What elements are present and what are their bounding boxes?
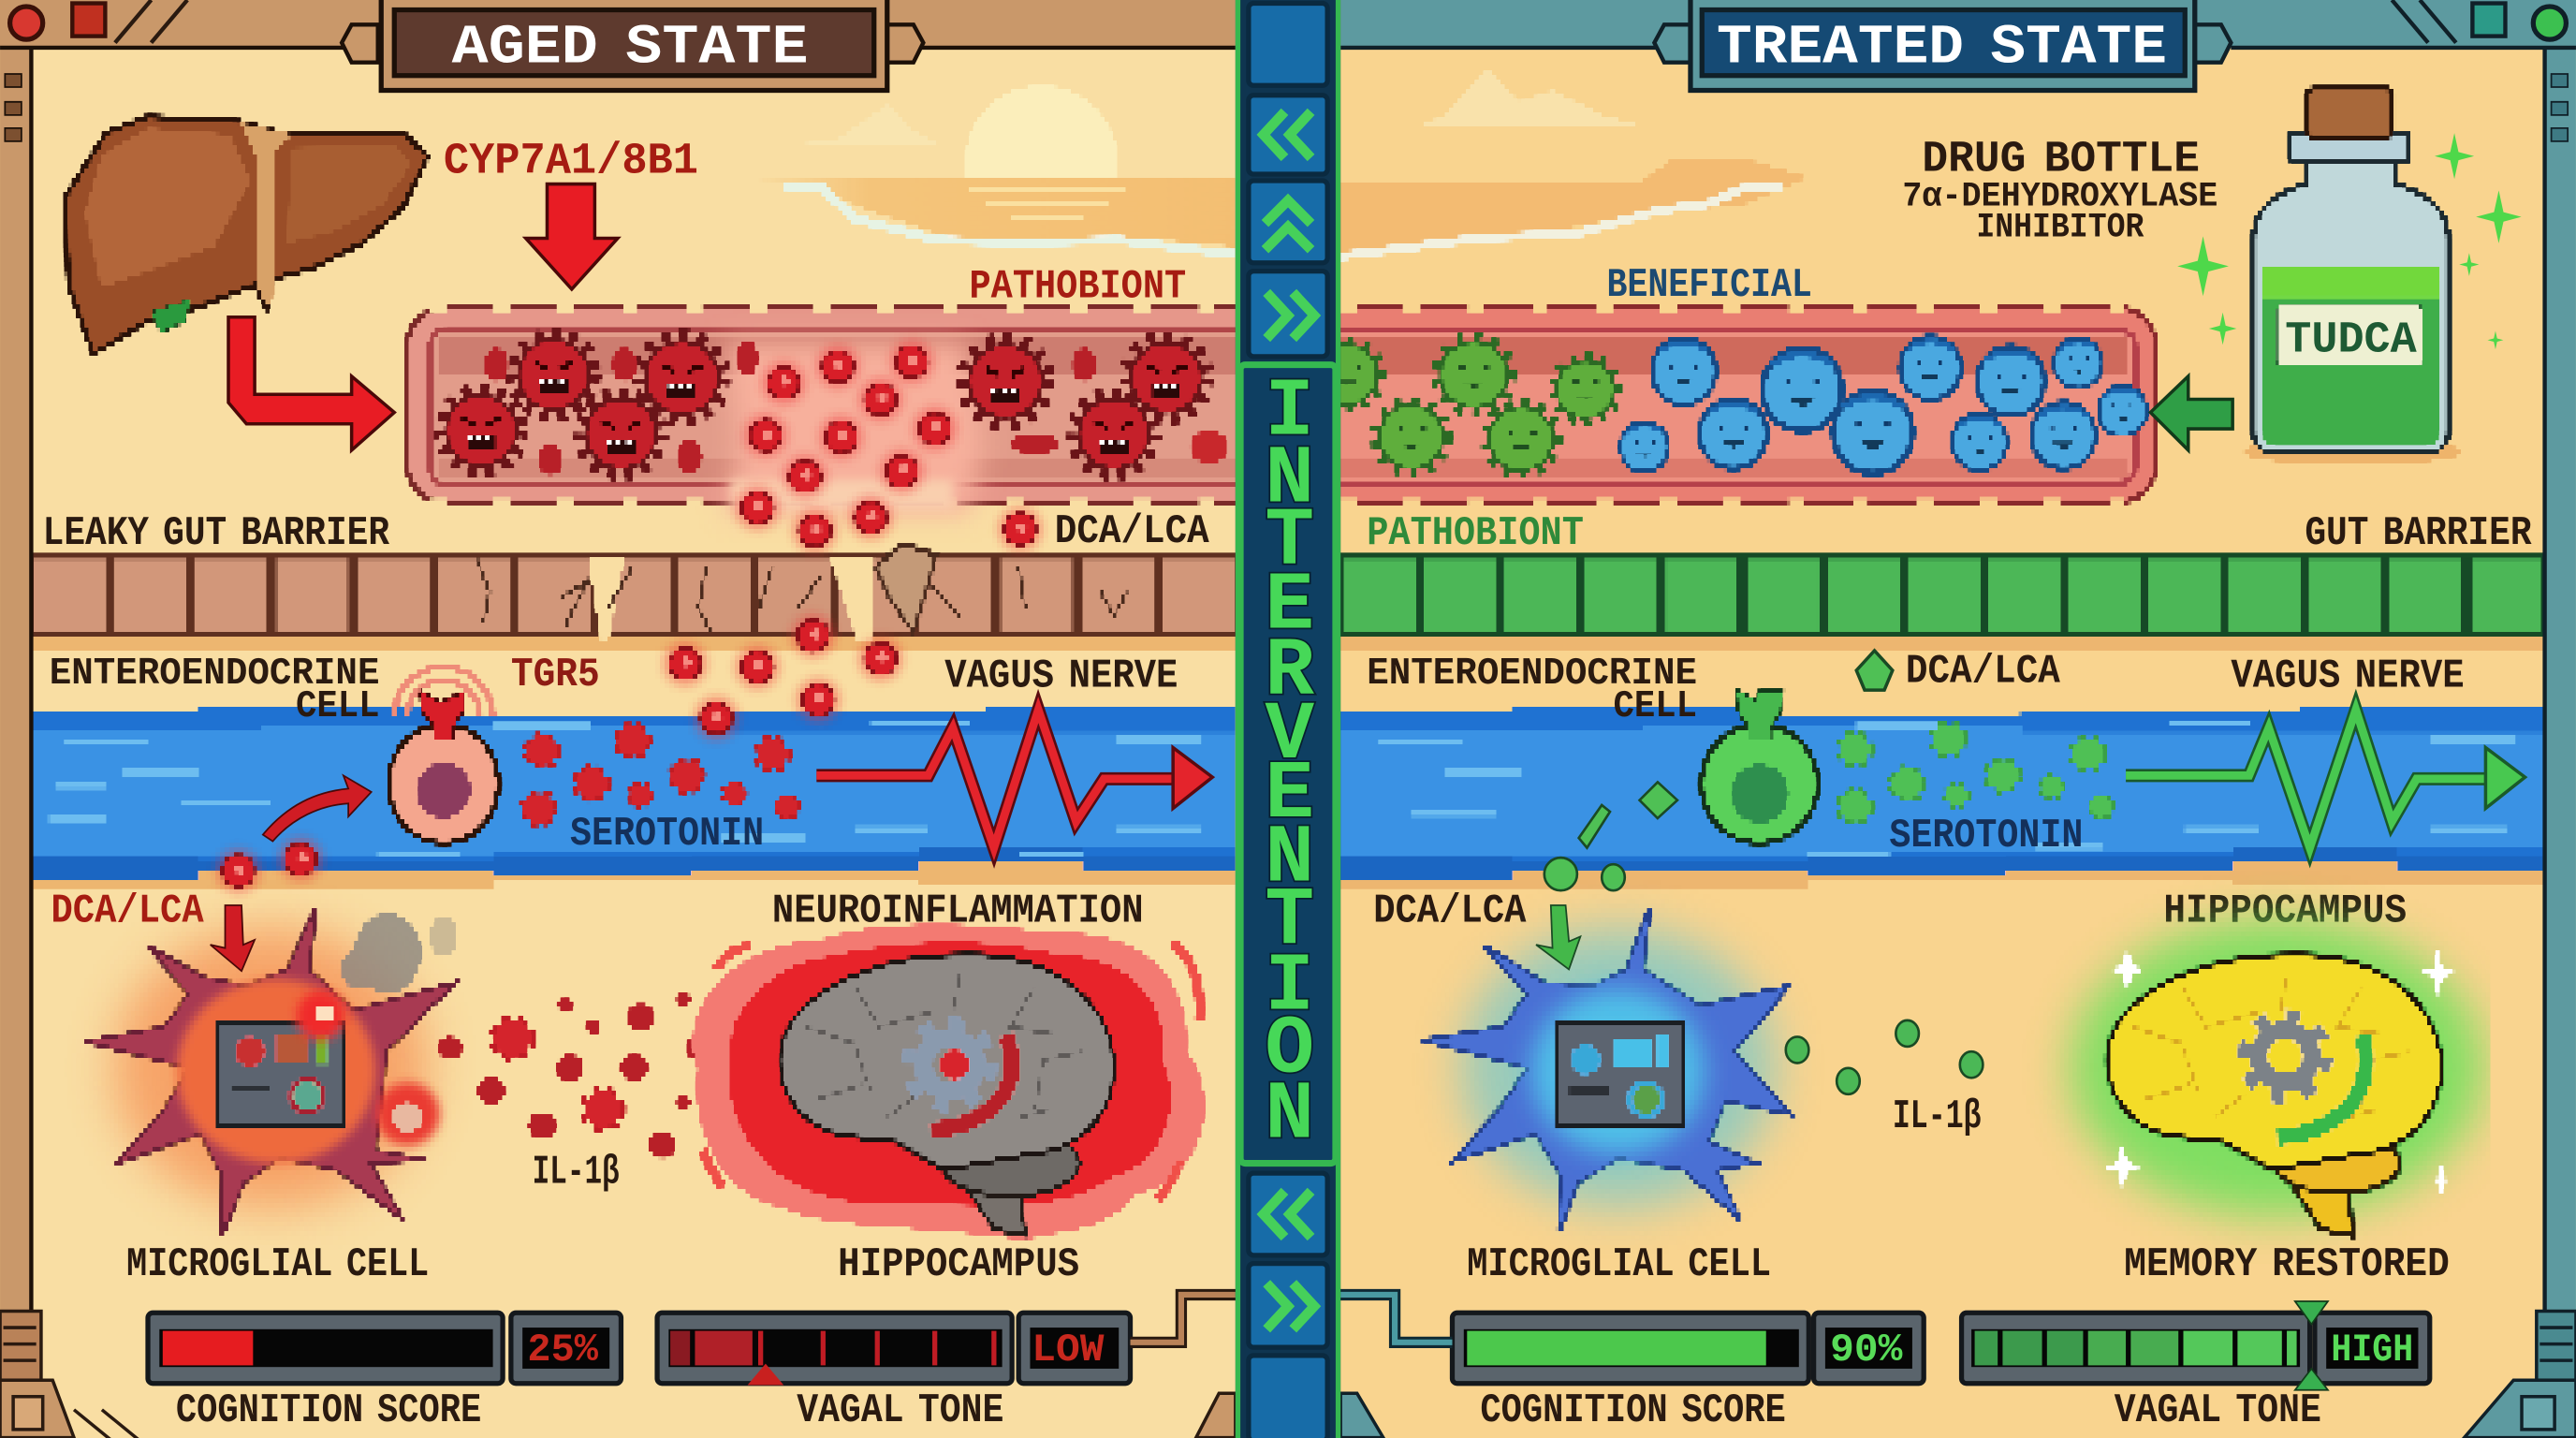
icon: drug bottle: [2244, 89, 2461, 465]
gem: green round: [2533, 7, 2566, 39]
smoke: [342, 914, 457, 992]
beneficial green bacteria: [1316, 340, 1615, 472]
panel: aged state: [30, 46, 1284, 1438]
button: chevron right top: [1249, 271, 1327, 357]
beneficial blue bacteria: [1621, 337, 2146, 473]
corner: bottom inner right: [1340, 1393, 1383, 1438]
gem: teal square: [2472, 4, 2505, 37]
gut tube: treated: [1298, 307, 2156, 503]
brain: treated: [2071, 920, 2482, 1236]
connector: treated gauge to center: [1338, 1295, 1453, 1343]
serotonin particles: aged: [524, 726, 798, 823]
leak gap in tube wall: [731, 479, 953, 509]
gear: [909, 1023, 990, 1106]
gut barrier blocks: treated: [1340, 557, 2546, 651]
frame: treated: [1340, 0, 2576, 1438]
label: enteroendocrine cell: ENTEROENDOCRINE: [50, 653, 379, 696]
label: IL-1β treated: IL-1β: [1893, 1093, 1982, 1140]
bile acid particles: treated: [1544, 782, 1677, 890]
title plaque: treated state: TREATED STATE: [1717, 16, 2167, 80]
title plaque: aged state: [342, 0, 923, 91]
gem: red square: [72, 4, 105, 37]
corner: bottom left: [0, 1312, 138, 1438]
gauge: cognition score treated: [1453, 1313, 1924, 1384]
gauge: vagal tone treated: [1962, 1301, 2430, 1390]
label: vagus nerve: VAGUS NERVE: [944, 653, 1178, 700]
label: TUDCA: TUDCA: [2285, 316, 2417, 366]
button: chevron right bottom: [1249, 1264, 1327, 1347]
chip: [218, 1023, 344, 1127]
icon: liver: [66, 117, 427, 353]
arrow: bottle to gut: [2150, 376, 2232, 450]
vagus nerve river: treated: [1340, 707, 2543, 888]
label: enteroendocrine cell: [50, 653, 379, 728]
corner: bottom right: [2465, 1312, 2576, 1438]
IL-1β cytokines: aged: [439, 992, 710, 1158]
label: hippocampus treated: HIPPOCAMPUS: [2163, 888, 2407, 935]
label: vagal tone treated: VAGAL TONE: [2115, 1387, 2321, 1434]
pathobiont bacteria: aged: [446, 339, 1227, 475]
label: cognition score aged: COGNITION SCORE: [176, 1387, 481, 1434]
sparkles: bottle: [2177, 133, 2522, 349]
label: leaky gut barrier: LEAKY GUT BARRIER: [43, 510, 390, 557]
button: chevron up: [1249, 181, 1327, 263]
arrow: liver to gut: [228, 317, 394, 450]
IL-1β cytokines: treated: [1786, 1020, 1983, 1094]
panel: treated state: [1298, 46, 2546, 1438]
label: beneficial: BENEFICIAL: [1606, 262, 1812, 309]
pulse: red vagal signal: [816, 710, 1212, 848]
label: hippocampus aged: HIPPOCAMPUS: [838, 1241, 1079, 1288]
label: serotonin treated: SEROTONIN: [1889, 813, 2083, 859]
label: enteroendocrine cell: CELL: [296, 685, 379, 728]
beach scenery: aged: [748, 85, 1236, 255]
gut tube: aged: [407, 307, 1284, 513]
label: TGR5: TGR5: [511, 652, 600, 698]
label: serotonin: SEROTONIN: [570, 811, 764, 858]
label: enteroendocrine cell treated: CELL: [1613, 685, 1697, 728]
gauge: cognition score aged: 25%: [527, 1328, 599, 1372]
label: DCA/LCA treated: DCA/LCA: [1906, 648, 2060, 695]
label: DCA/LCA lower treated: DCA/LCA: [1373, 888, 1527, 935]
gut breach glow: [726, 342, 983, 513]
intervention panel: [1240, 365, 1336, 1164]
panel background: treated: [1338, 46, 2546, 1438]
label: cognition score treated: COGNITION SCORE: [1480, 1387, 1786, 1434]
label: DCA/LCA: DCA/LCA: [1055, 508, 1209, 555]
label: DCA/LCA lower: DCA/LCA: [51, 888, 204, 935]
title plaque: aged state: AGED STATE: [452, 16, 809, 80]
button: top plain: [1249, 4, 1327, 85]
gauge: vagal tone treated: HIGH: [2331, 1328, 2413, 1372]
brain: aged: [693, 924, 1204, 1240]
pulse: green vagal signal: [2126, 710, 2525, 848]
vertical word INTERVENTION: INTERVENTION: [1265, 366, 1314, 1162]
label: vagal tone aged: VAGAL TONE: [797, 1387, 1003, 1434]
explosions: [296, 990, 439, 1145]
label: memory restored: MEMORY RESTORED: [2124, 1241, 2450, 1288]
sparkles: brain: [2102, 946, 2458, 1194]
label: gut barrier: GUT BARRIER: [2305, 510, 2532, 557]
arrow: to microglia: [211, 905, 255, 971]
gauge: vagal tone aged: LOW: [1032, 1328, 1105, 1372]
enteroendocrine cell: treated: [1702, 690, 1817, 843]
title plaque: treated state: [1654, 0, 2231, 91]
gauge: cognition score aged: [148, 1313, 621, 1384]
label: enteroendocrine cell treated: [1367, 653, 1697, 728]
gear treated: [2244, 1016, 2326, 1097]
label: drug bottle: INHIBITOR: [1976, 209, 2144, 248]
label: neuroinflammation: NEUROINFLAMMATION: [772, 888, 1144, 935]
hippocampus crescent: [929, 1035, 1012, 1130]
arrow: to microglia treated: [1536, 905, 1580, 969]
frame: aged: [0, 0, 1236, 1438]
button: chevron left top: [1249, 95, 1327, 174]
center intervention column: [1236, 0, 1340, 1438]
label: enteroendocrine cell treated: ENTEROENDOCRINE: [1367, 653, 1697, 696]
button: chevron left bottom: [1249, 1173, 1327, 1255]
label: vagus nerve treated: VAGUS NERVE: [2231, 653, 2465, 700]
microglial cell: treated: [1423, 909, 1789, 1232]
gauge: vagal tone aged: [657, 1313, 1131, 1385]
corner: bottom inner left: [1196, 1393, 1236, 1438]
label: IL-1β aged: IL-1β: [533, 1150, 620, 1196]
panel background: aged: [30, 46, 1238, 1438]
beach scenery: treated: [1340, 69, 1808, 259]
icon: DCA/LCA green marker: [1856, 651, 1893, 690]
vagus nerve river: aged: [30, 707, 1236, 888]
label: pathobiont treated: PATHOBIONT: [1367, 510, 1584, 557]
DCA/LCA bile acid dots: aged: [217, 340, 1042, 892]
label: drug bottle: 7α-DEHYDROXYLASE: [1902, 177, 2217, 216]
serotonin particles: treated: [1840, 725, 2112, 822]
gem: red round: [10, 7, 43, 39]
connector: aged gauge to center: [1131, 1295, 1238, 1343]
label: microglial cell treated: MICROGLIAL CELL: [1467, 1241, 1771, 1288]
label: microglial cell: MICROGLIAL CELL: [126, 1241, 429, 1288]
microglial cell: aged: [85, 909, 457, 1236]
label: pathobiont: PATHOBIONT: [970, 264, 1186, 311]
gauge: cognition score treated: 90%: [1830, 1328, 1903, 1372]
enteroendocrine cell: aged: [389, 668, 498, 843]
arrow: red down: [526, 184, 618, 289]
label: CYP7A1/8B1: CYP7A1/8B1: [444, 137, 698, 186]
label: drug bottle: [1902, 136, 2217, 248]
arrow: to enteroendocrine: [263, 775, 372, 842]
button: bottom plain: [1249, 1356, 1327, 1438]
chip treated: [1556, 1023, 1682, 1127]
label: drug bottle: DRUG BOTTLE: [1922, 136, 2200, 185]
leaky gut barrier blocks: [30, 544, 1238, 651]
